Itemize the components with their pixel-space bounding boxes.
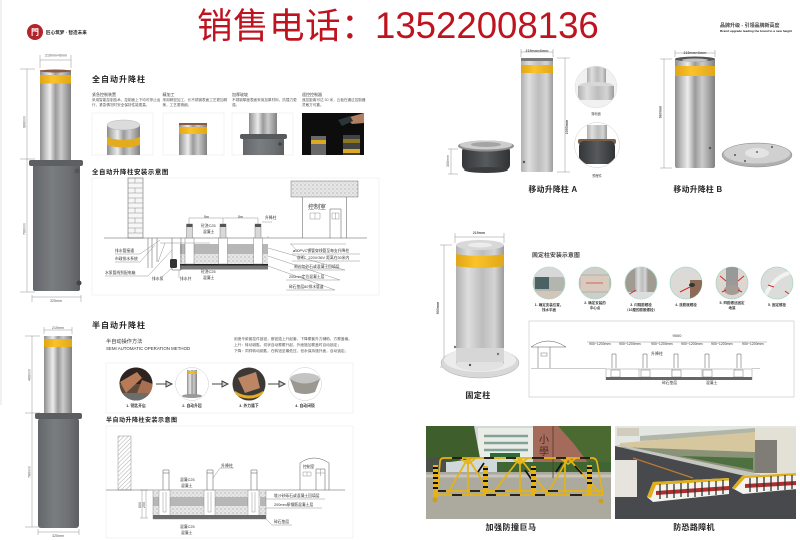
- hatched wall: [118, 436, 131, 490]
- step 2: 2. 确定安装的: [584, 300, 606, 305]
- feature: emergency control: 紧急控制装置: [92, 91, 116, 97]
- heading: fully automatic bollard: 全自动升降柱: [92, 74, 146, 84]
- photo: reinforced anti-collision barrier: 小: [539, 434, 549, 446]
- centre annotations: 混凝土: [181, 530, 193, 535]
- label: mobile bollard B: 移动升降柱 B: [674, 184, 723, 194]
- depth dimensions: 800: [138, 502, 142, 508]
- centre annotations: [180, 477, 195, 535]
- brand logo: 門: [31, 28, 39, 37]
- bollard: semi-automatic: 219mm: [52, 326, 64, 330]
- step 1: [533, 267, 565, 312]
- step 1: 1. 确定安装位置，: [535, 302, 563, 307]
- heading: semi-automatic bollard: 半自动升降柱: [92, 320, 146, 330]
- bollard B group: 960mm: [658, 106, 662, 118]
- centre annotations: 混凝C25: [180, 477, 195, 482]
- bollard: fully automatic: [20, 54, 83, 303]
- spacing labels: 900~1200mm: [619, 342, 641, 346]
- spacing labels: [587, 342, 767, 346]
- step 3: press down: 3. 外力腰下: [239, 403, 259, 408]
- feature: remote control: 遥控控制器: [302, 91, 322, 97]
- photo: reinforced anti-collision barrier: [426, 426, 611, 519]
- spacing labels: 900~1200mm: [589, 342, 611, 346]
- spacing labels: 900~1200mm: [711, 342, 733, 346]
- page edge shading: [0, 0, 2, 405]
- label: mobile bollard A: 移动升降柱 A: [529, 184, 578, 194]
- feature: thickened base: 加厚玻坡: [232, 91, 248, 97]
- left annotations: [105, 240, 192, 281]
- spacing labels: 900~1200mm: [651, 342, 673, 346]
- centre annotations: 砼浇C25: [201, 269, 216, 274]
- arrow: [268, 381, 285, 387]
- bollard: semi-automatic: 325mm: [52, 534, 64, 538]
- feature: remote control: [302, 91, 366, 155]
- right annotations: [266, 493, 325, 525]
- feature: remote control: 灵敏方可靠。: [302, 102, 324, 107]
- gravel label: 碎石垫层: [662, 380, 677, 385]
- centre annotations: [201, 215, 277, 280]
- detail circle: top of bollard A: 落地面: [591, 111, 601, 116]
- fixed install steps: [533, 267, 793, 312]
- label: fixed bollard: 固定柱: [465, 390, 491, 400]
- brick wall: [128, 178, 143, 238]
- step 6: 5. 固定螺栓: [768, 302, 786, 307]
- centre annotations: 5m: [204, 215, 209, 219]
- spacing labels: 900~1200mm: [742, 342, 764, 346]
- operation method heading: SEMI AUTOMATIC OPERATION METHOD: [106, 346, 190, 351]
- bollards above ground: [163, 470, 257, 490]
- operation description: 上升：转动钥匙，切状自动覆覆升起，外面施加覆盖时自动锁定；: [234, 342, 341, 347]
- detail circle: base of bollard A: 预埋件: [592, 173, 603, 178]
- right annotations: 碎石垫层80排水管道: [289, 284, 324, 289]
- step 2: auto rise: [176, 368, 208, 408]
- spacing labels: 900~1200mm: [681, 342, 703, 346]
- right annotations: 碎石垫层: [274, 519, 289, 524]
- bollard annotation: 升降柱: [221, 462, 233, 468]
- bollard B group: [658, 50, 792, 168]
- bollard annotation: [213, 462, 234, 478]
- brand logo: [27, 24, 87, 40]
- centre annotations: 混凝土: [203, 275, 215, 280]
- subheading: automatic installation diagram: 全自动升降柱安装示意图: [92, 167, 169, 176]
- right annotations: [268, 248, 360, 290]
- centre annotations: 砼浇C25: [201, 223, 216, 228]
- dimensions and pipes: [189, 218, 346, 250]
- ground line: [531, 368, 760, 370]
- photo: anti-terror road blocker: [615, 426, 797, 519]
- centre annotations: 混凝C25: [180, 524, 195, 529]
- label: reinforced barrier: 加强防撞巨马: [486, 522, 536, 532]
- operation description: 下降：同样转动钥匙，在转钮至最低压，但永保持施外面，自动锁定。: [234, 348, 348, 353]
- ground line: [104, 237, 367, 239]
- feature: fine machining: [162, 91, 228, 155]
- step 3: 3. 闪隔膨螺栓: [630, 302, 652, 307]
- bollard: fully automatic: 219mm×6mm: [45, 54, 67, 58]
- depth dimensions: 200: [142, 502, 146, 508]
- bollard: fully automatic: 900mm: [22, 116, 26, 128]
- left annotations: 排水井: [180, 276, 192, 281]
- detail circle: top of bollard A: [575, 66, 617, 116]
- step 4: auto close: 4. 自动闭锁: [295, 403, 315, 408]
- feature: thickened base: 不锈钢厚度表面采用加厚材料，抗撞力更: [232, 97, 297, 102]
- control room: [300, 458, 329, 490]
- bollard: semi-automatic: 780mm: [28, 466, 32, 478]
- feature: emergency control: 行，紧急情况时安全保持性能更高。: [92, 102, 150, 107]
- arrow: [212, 381, 228, 387]
- left annotations: 排水泵: [152, 276, 164, 281]
- label: anti-terror blocker: 防恐路障机: [673, 522, 715, 532]
- left annotations: 市政排水系统: [115, 256, 138, 261]
- operation description: [234, 336, 352, 353]
- brand slogan: 品牌升级 - 引领品牌新高度: [720, 22, 779, 29]
- bollard: semi-automatic: 460mm: [28, 369, 32, 381]
- feature: fine machining: 采用精密加工，长不锈钢表面工艺更加精: [162, 97, 228, 102]
- photo: reinforced anti-collision barrier: 學: [539, 445, 549, 458]
- detail circle: base of bollard A: [574, 122, 620, 178]
- control room: [291, 181, 358, 238]
- step 4: 4. 放膨胀螺栓: [675, 302, 697, 307]
- step 1: key unlock: [119, 367, 153, 408]
- row of bollards: [612, 354, 741, 368]
- left annotations: 排水管接通: [115, 248, 134, 253]
- centre annotations: 升降柱: [265, 215, 277, 220]
- right annotations: 堆沙砂砾石或混凝土回填层: [274, 493, 320, 498]
- bollard A group: [446, 49, 570, 174]
- centre annotations: 5m: [238, 215, 243, 219]
- three bollards: [186, 224, 261, 238]
- phone number: 13522008136: [375, 5, 599, 46]
- feature: remote control: 遥控距离可达 30 米，云板在通过控制器: [302, 97, 366, 102]
- subheading: fixed bollard installation: 固定柱安装示意图: [532, 251, 580, 259]
- operation method heading: 半自动操作方法: [106, 337, 142, 345]
- feature: thickened base: 强。: [232, 102, 239, 107]
- step 2: auto rise: 2. 自动升起: [182, 403, 202, 408]
- bollard: semi-automatic: [25, 326, 82, 538]
- total width: 9000: [673, 333, 682, 338]
- diagram: automatic bollard installation: [92, 178, 379, 295]
- foundation: [606, 369, 752, 380]
- bollard B group: 219mm×6mm: [684, 51, 706, 55]
- step 5: 地底: [728, 305, 736, 310]
- control room: 控制室: [308, 203, 326, 211]
- bollard: fully automatic: 700mm: [22, 223, 26, 235]
- diagram: semi-automatic installation: [106, 426, 353, 538]
- guard hut: [531, 341, 566, 368]
- left annotations: 水泵管线到配电箱: [105, 270, 136, 275]
- centre annotations: 混凝土: [203, 229, 215, 234]
- diagram: fixed bollard row: [529, 321, 794, 397]
- right annotations: 200mm厚钢筋混凝土层: [274, 502, 313, 507]
- drainage well and pump: [148, 238, 210, 270]
- subheading: semi-automatic installation diagram: 半自动升降柱安装示意图: [106, 416, 178, 424]
- step 3: [625, 267, 657, 312]
- brand slogan: Brand upgrade leading the brand to a new height: [720, 29, 792, 33]
- fixed bollard: 900mm: [436, 302, 440, 314]
- step 2: 中心点: [590, 305, 601, 310]
- operation description: 用遥令款套控件锁钮，断钮插上升起套，下降覆套外力辅助，方覆盖格。: [234, 336, 352, 341]
- feature: fine machining: 美，工艺更精细。: [162, 102, 191, 107]
- step 4: [670, 267, 702, 307]
- step 5: 5. 四膨螺丝固定: [720, 300, 745, 305]
- bollard A group: 300mm: [446, 155, 450, 167]
- right annotations: ø50PVC镀管穿线管至每支升降柱: [293, 248, 349, 253]
- centre annotations: 混凝土: [181, 483, 193, 488]
- right annotations: 说明：220V/36V 距离在30米内: [297, 255, 350, 260]
- control room: 控制室: [303, 464, 315, 469]
- bollard: fully automatic: 325mm: [50, 299, 62, 303]
- excavated pit: [180, 238, 268, 270]
- concrete label: 混凝土: [706, 380, 718, 385]
- bollard A group: 1000mm: [565, 120, 569, 134]
- step 1: 找水平面: [542, 307, 556, 312]
- step 1: key unlock: 1. 钥匙开启: [126, 403, 146, 408]
- ground line: [106, 489, 345, 491]
- right annotations: 200mm定位混凝土层: [289, 274, 325, 279]
- sales phone heading: 销售电话：: [197, 6, 377, 46]
- operation method heading: [106, 337, 190, 351]
- bollard label: 升降柱: [651, 350, 663, 356]
- feature: emergency control: 采用智能控制技术，控制面上下均可停止运: [92, 97, 161, 102]
- depth dimensions: [138, 490, 148, 518]
- fixed bollard: [436, 231, 519, 378]
- brand slogan: [720, 22, 792, 33]
- bollard A group: 219mm×6mm: [526, 49, 548, 53]
- step 6: [761, 267, 793, 307]
- right annotations: 周边包砂石或混凝土回填层: [294, 264, 340, 269]
- step 2: [579, 267, 611, 310]
- feature: thickened base: [232, 91, 297, 155]
- feature: emergency control: [92, 91, 161, 155]
- step 3: （10厘的膨胀螺栓）: [625, 307, 657, 312]
- step 3: press down: [232, 368, 266, 408]
- barrier frame: [432, 458, 604, 504]
- step 4: auto close: [288, 368, 322, 408]
- fixed bollard: 219mm: [473, 231, 485, 235]
- panel: operation steps: [106, 363, 353, 413]
- brand logo: 匠心筑梦 · 智造未来: [46, 29, 87, 36]
- arrow: [156, 381, 172, 387]
- feature: fine machining: 精加工: [162, 91, 174, 97]
- step 5: [716, 267, 748, 310]
- foundation pit: [153, 490, 266, 519]
